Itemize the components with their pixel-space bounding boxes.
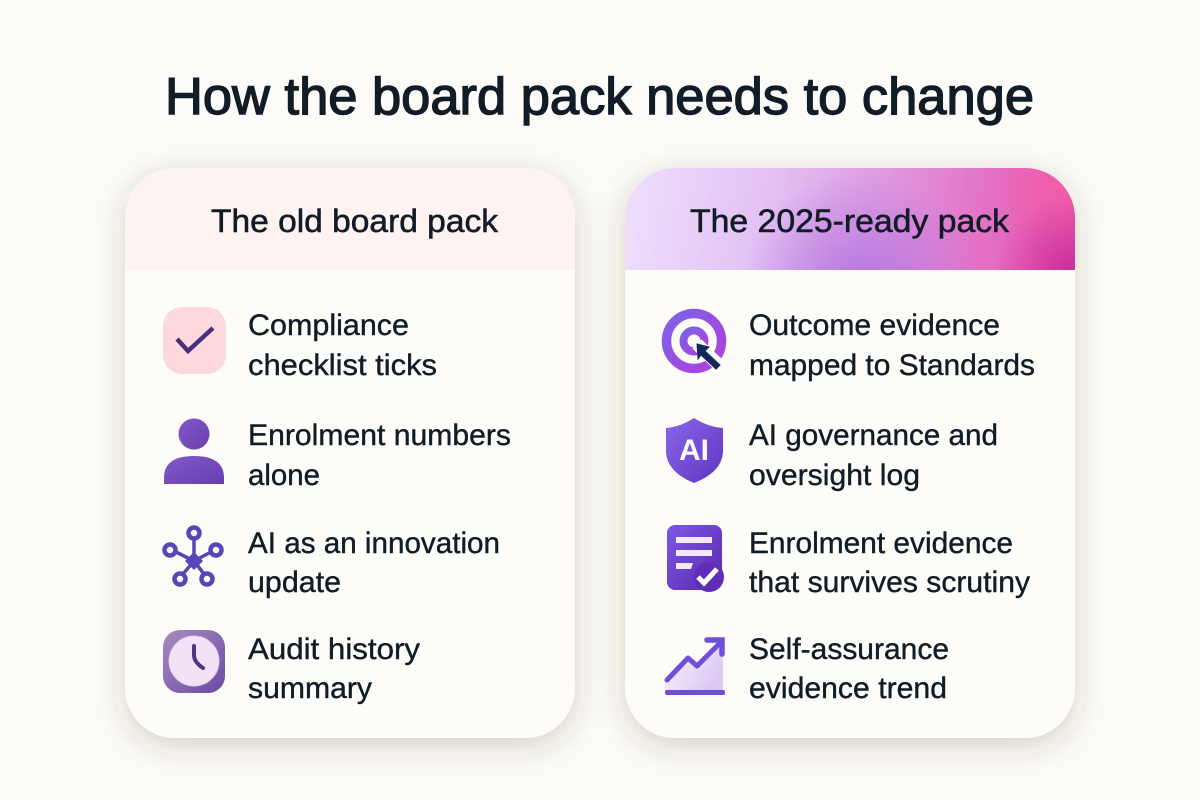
icon: AI shield: AI (679, 434, 709, 467)
text: AI governance and oversight log: AI governance and (749, 419, 998, 452)
panel: the old board pack (125, 168, 575, 738)
text: AI governance and oversight log: oversight log (749, 459, 920, 492)
icon: target with cursor (666, 314, 723, 369)
text: enrolment evidence that survives scrutiny (749, 527, 1030, 599)
text: compliance checklist ticks (248, 309, 437, 382)
text: outcome evidence mapped to standards: mapped to Standards (749, 349, 1035, 382)
icon: AI shield (666, 418, 723, 483)
text: self-assurance evidence trend: Self-assurance (749, 633, 949, 666)
card background (125, 168, 575, 738)
text: enrolment evidence that survives scrutiny: that survives scrutiny (749, 566, 1030, 599)
panel: the 2025-ready pack (625, 168, 1075, 738)
title: How the board pack needs to change (165, 68, 1034, 126)
text: compliance checklist ticks: Compliance (248, 309, 409, 342)
text: audit history summary (248, 633, 420, 705)
panel heading: The old board pack (211, 203, 499, 239)
text: enrolment numbers alone: Enrolment numbers (248, 419, 511, 452)
text: audit history summary: Audit history (248, 633, 420, 666)
panel heading: The 2025-ready pack (690, 203, 1010, 239)
text: AI as an innovation update: update (248, 566, 341, 599)
text: self-assurance evidence trend (749, 633, 949, 705)
icon: network nodes (164, 528, 222, 584)
text: enrolment numbers alone: alone (248, 459, 320, 492)
text: AI governance and oversight log (749, 419, 998, 492)
text: outcome evidence mapped to standards (749, 309, 1035, 382)
text: outcome evidence mapped to standards: Outcome evidence (749, 309, 1000, 342)
text: AI as an innovation update: AI as an innovation (248, 527, 500, 560)
text: audit history summary: summary (248, 672, 372, 705)
text: enrolment numbers alone (248, 419, 511, 492)
text: enrolment evidence that survives scrutiny: Enrolment evidence (749, 527, 1013, 560)
icon: checkmark tile (163, 307, 226, 374)
text: compliance checklist ticks: checklist ticks (248, 349, 437, 382)
icon: document with check (667, 525, 724, 592)
icon: person (164, 418, 224, 484)
card background (625, 168, 1075, 738)
text: AI as an innovation update (248, 527, 500, 599)
icon: rising trend chart (665, 640, 725, 695)
panel header band (125, 168, 575, 270)
text: self-assurance evidence trend: evidence trend (749, 672, 947, 705)
panel header band (625, 168, 1075, 270)
icon: clock tile (163, 630, 225, 693)
